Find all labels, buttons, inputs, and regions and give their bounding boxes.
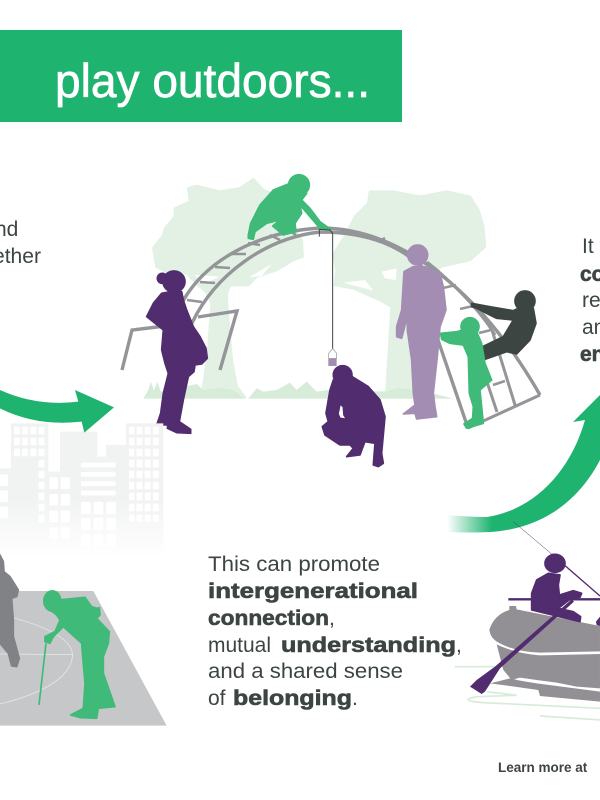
text block: intergenerational connection: , [456, 634, 462, 657]
green child on top of arch [248, 175, 331, 239]
court scene [0, 555, 167, 726]
text block: intergenerational connection: connection , [208, 607, 335, 630]
rod thick part [552, 554, 600, 596]
people on frame, first group [147, 175, 385, 467]
text block: right [580, 235, 600, 366]
green child climbing [441, 318, 492, 428]
city skyline [0, 423, 167, 557]
people on frame, second group [397, 245, 536, 428]
right tree [333, 192, 485, 397]
crouching adult silhouette [322, 366, 385, 467]
text block: intergenerational connection: and a shared sense [208, 660, 403, 683]
trees and grass background [143, 179, 485, 399]
water ripples [455, 667, 600, 720]
person rowing [532, 554, 582, 622]
lilac standing adult [397, 245, 446, 419]
elderly person with cane [39, 590, 115, 718]
court floor [0, 591, 167, 726]
text block: left [0, 218, 41, 268]
text block: right: It [582, 235, 594, 258]
tree gaps between branches [195, 264, 397, 291]
paddle [470, 599, 574, 694]
text block: intergenerational connection: understanding [281, 634, 456, 657]
text block: intergenerational connection: . [352, 687, 358, 710]
arch rails [183, 228, 540, 428]
climbing frame [122, 228, 540, 428]
court lines [0, 617, 73, 704]
title banner: play outdoors... [55, 54, 370, 107]
horizontal oar [508, 596, 600, 603]
left tree [153, 179, 303, 397]
green arrow: left [0, 390, 114, 433]
text block: intergenerational connection: of [208, 687, 231, 710]
text block: intergenerational connection: mutual [208, 634, 277, 657]
grass [143, 382, 453, 399]
bucket string [319, 229, 333, 349]
title banner [0, 30, 402, 122]
grey figure [0, 555, 19, 667]
green arrow: right [447, 395, 600, 532]
boat hull [489, 606, 600, 702]
pregnant woman silhouette [147, 271, 207, 433]
left support bars [122, 311, 237, 370]
text block: intergenerational connection: belonging [233, 687, 352, 710]
frame rungs [187, 230, 505, 385]
text block: intergenerational connection: This can promote [208, 553, 380, 576]
second knee [596, 617, 600, 626]
footer link text: Learn more at [498, 760, 588, 775]
fishing rod [513, 522, 552, 554]
text block: intergenerational connection [208, 553, 462, 710]
boat scene [455, 522, 600, 720]
bucket [328, 349, 337, 366]
text block: intergenerational connection: intergenerational [208, 580, 418, 603]
dark child swinging [472, 291, 536, 359]
lower ladder rails [427, 262, 540, 428]
